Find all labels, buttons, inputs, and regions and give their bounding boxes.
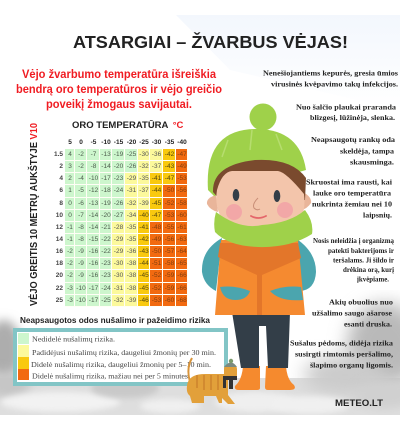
hair xyxy=(213,160,306,200)
wind chill table: -39 xyxy=(127,297,136,304)
boots xyxy=(235,366,295,390)
wind chill table: -68 xyxy=(177,297,187,304)
wind chill table: -24 xyxy=(114,187,123,194)
wind chill table: -1 xyxy=(67,236,73,243)
wind chill table: -66 xyxy=(177,272,187,279)
wind chill table: -16 xyxy=(89,248,98,255)
wind chill table: -58 xyxy=(177,200,187,207)
advice: feet: šlapimo organų ligomis. xyxy=(310,360,393,370)
wind chill table: -53 xyxy=(177,175,187,182)
wind chill table: -9 xyxy=(78,260,84,267)
legend text: Padidėjusi nušalimų rizika, daugeliui žmonių per 30 min. xyxy=(32,348,216,357)
wind chill table: -10 xyxy=(89,175,98,182)
wind chill table: -23 xyxy=(101,272,111,279)
wind chill table: -41 xyxy=(152,175,161,182)
left sleeve xyxy=(202,238,222,291)
advice: hands: skausminga. xyxy=(350,158,394,166)
legend panel xyxy=(15,330,226,384)
wind chill table: 10 xyxy=(56,212,63,219)
cat body xyxy=(187,374,235,404)
wind chill table: -49 xyxy=(177,163,187,170)
wind chill table: -10 xyxy=(101,139,111,146)
wind chill table: -2 xyxy=(67,272,73,279)
legend text: Didelė nušalimų rizika, daugeliui žmonių per 5–10 min. xyxy=(31,360,211,369)
wind chill table: -30 xyxy=(152,139,161,146)
wind chill table: -17 xyxy=(101,175,111,182)
wind chill table: -32 xyxy=(114,297,123,304)
advice: nose: įkvėpiame. xyxy=(357,276,389,284)
legend swatch: high risk xyxy=(18,357,29,369)
coat yoke and zip xyxy=(218,243,301,315)
wind chill table: -2 xyxy=(67,260,73,267)
advice: hair: blizgesį, lūžinėja, slenka. xyxy=(310,113,395,122)
advice: feet: susirgti rimtomis peršalimo, xyxy=(295,350,393,358)
advice: hair: Nuo šalčio plaukai praranda xyxy=(296,102,396,112)
wind chill table: -42 xyxy=(165,151,174,158)
wind chill table: -10 xyxy=(76,297,86,304)
wind chill table: -47 xyxy=(177,151,187,158)
wind chill table: -30 xyxy=(139,151,149,158)
wind chill table: -4 xyxy=(78,175,84,182)
legend text: Didelė nušalimų rizika, mažiau nei per 5 minutes. xyxy=(32,372,190,380)
cat head xyxy=(224,365,237,379)
advice: cheeks xyxy=(306,178,392,220)
advice: cheeks: laipsnių. xyxy=(363,210,392,220)
wind chill table: -14 xyxy=(89,212,98,219)
wind chill table: -51 xyxy=(152,260,161,267)
wind chill table: -38 xyxy=(127,260,136,267)
red intro text: poveikį žmogaus savijautai. xyxy=(46,97,192,111)
wind chill table: -56 xyxy=(165,236,174,243)
wind chill table: -60 xyxy=(177,212,187,219)
wind chill table: 20 xyxy=(56,272,63,279)
wind chill table: -52 xyxy=(152,272,161,279)
legend swatch: low risk xyxy=(18,333,29,344)
wind chill table: 2 xyxy=(68,175,72,182)
wind chill table: -26 xyxy=(127,163,136,170)
wind chill table: -40 xyxy=(177,139,187,146)
wind chill table: -31 xyxy=(127,187,136,194)
advice: hands: Neapsaugotų rankų oda xyxy=(311,135,395,144)
wind chill table: -8 xyxy=(78,236,84,243)
wind chill table: -44 xyxy=(139,260,149,267)
wind chill table: -44 xyxy=(152,187,161,194)
advice: cheeks: nukrinta žemiau nei 10 xyxy=(312,200,392,208)
wind chill table: 2 xyxy=(59,163,63,170)
wind chill table: -14 xyxy=(89,224,98,231)
wind chill table: -52 xyxy=(165,200,174,207)
advice: feet xyxy=(290,338,393,370)
wind chill table: -3 xyxy=(67,285,73,292)
title: ATSARGIAI – ŽVARBUS VĖJAS! xyxy=(73,31,348,52)
legend text xyxy=(31,334,216,380)
cat tail xyxy=(188,358,192,382)
wind chill table: -2 xyxy=(78,151,84,158)
wind chill table: -25 xyxy=(101,297,111,304)
advice: nose: patekti bakterijoms ir xyxy=(328,248,394,255)
wind chill table: -29 xyxy=(114,248,123,255)
background sky tint xyxy=(176,15,400,110)
wind chill table: -8 xyxy=(91,163,96,170)
wind chill table: -22 xyxy=(101,236,111,243)
wind chill table: -64 xyxy=(177,248,187,255)
wind chill table: -28 xyxy=(114,224,123,231)
advice: hats xyxy=(263,68,398,88)
wind chill table: -53 xyxy=(152,297,161,304)
wind chill table: -50 xyxy=(152,248,161,255)
wind chill table: 8 xyxy=(59,200,63,207)
red intro text xyxy=(16,67,222,111)
wind chill table: -63 xyxy=(177,236,187,243)
wind chill table: -40 xyxy=(139,212,149,219)
wind chill table: -57 xyxy=(165,248,174,255)
advice: eyes: užšalimo saugo ašarose xyxy=(312,308,393,318)
wind chill table: 1.5 xyxy=(54,151,63,158)
vertical axis label: wind speed: VĖJO GREITIS 10 METRŲ AUKŠTYJE V10 xyxy=(28,123,40,306)
wind chill table: -36 xyxy=(152,151,161,158)
hat ribs xyxy=(222,130,282,157)
pompom xyxy=(250,104,276,130)
wind chill table: -12 xyxy=(89,187,98,194)
wind chill table: -50 xyxy=(165,187,174,194)
red intro text: Vėjo žvarbumo temperatūra išreiškia xyxy=(22,67,216,81)
orange coat xyxy=(215,240,305,315)
wind chill table: -36 xyxy=(127,248,136,255)
wind chill table: -56 xyxy=(177,187,187,194)
cat stripes xyxy=(197,375,218,390)
wind chill table: -49 xyxy=(152,236,161,243)
right ear xyxy=(301,192,311,210)
wind chill table: -17 xyxy=(89,297,98,304)
wind chill table: -2 xyxy=(78,163,84,170)
advice: eyes: Akių obuolius nuo xyxy=(329,298,393,306)
wind chill table: 4 xyxy=(68,151,72,158)
wind chill table: -25 xyxy=(139,139,149,146)
wind chill table: -17 xyxy=(89,285,98,292)
wind chill table: -25 xyxy=(127,151,136,158)
wind chill table: -19 xyxy=(114,151,123,158)
wind chill table: -47 xyxy=(152,212,161,219)
illustration: child in winter clothes xyxy=(202,104,316,390)
wind chill table: -65 xyxy=(177,260,187,267)
wind chill table: -53 xyxy=(165,212,174,219)
wind chill table: 5 xyxy=(68,139,72,146)
wind chill table: -27 xyxy=(114,212,123,219)
wind chill table: -60 xyxy=(165,297,174,304)
wind chill table: -31 xyxy=(114,285,123,292)
cat scarf xyxy=(223,376,237,389)
wind chill table: -66 xyxy=(177,285,187,292)
scarf xyxy=(214,210,312,247)
wind chill table: 0 xyxy=(79,139,83,146)
wind chill table: -15 xyxy=(114,139,123,146)
wind chill table: -46 xyxy=(139,297,149,304)
right sleeve xyxy=(292,236,316,291)
wind chill table: 4 xyxy=(59,175,63,182)
wind chill table: -20 xyxy=(114,163,123,170)
wind chill table: 18 xyxy=(56,260,63,267)
wind chill table: 22 xyxy=(56,285,63,292)
wind chill table: -61 xyxy=(177,224,187,231)
wind chill table: -58 xyxy=(165,260,174,267)
advice: hats: virusinės kvėpavimo takų infekcijos. xyxy=(271,80,398,88)
wind chill table: -43 xyxy=(139,248,149,255)
left pocket xyxy=(220,286,250,300)
cheeks xyxy=(226,202,293,220)
wind chill table: -5 xyxy=(91,139,96,146)
wind chill table: -35 xyxy=(165,139,174,146)
advice: nose xyxy=(313,238,395,284)
wind chill table: -16 xyxy=(89,272,98,279)
wind chill table: -32 xyxy=(127,200,136,207)
wind chill table: 25 xyxy=(56,297,63,304)
wind chill table: -8 xyxy=(78,224,84,231)
wind chill table: 0 xyxy=(68,212,72,219)
wind chill table: 6 xyxy=(59,187,63,194)
nose xyxy=(254,198,260,210)
legend text: Nedidelė nušalimų rizika. xyxy=(32,334,115,344)
wind chill table: -20 xyxy=(127,139,136,146)
wind chill table: -21 xyxy=(101,224,111,231)
wind chill table: -29 xyxy=(114,236,123,243)
wind chill table: -5 xyxy=(78,187,84,194)
wind chill table: -43 xyxy=(165,163,174,170)
wind chill table: -18 xyxy=(101,187,111,194)
wind chill table: -59 xyxy=(165,285,174,292)
mouth xyxy=(251,216,266,218)
left ear xyxy=(207,195,218,212)
advice: cheeks: lauke oro temperatūra xyxy=(313,188,391,198)
hat xyxy=(208,129,306,196)
right pocket xyxy=(270,286,303,300)
wind chill table: -7 xyxy=(78,212,84,219)
right column advice text xyxy=(202,68,398,390)
wind chill table: -24 xyxy=(101,285,111,292)
trousers xyxy=(232,312,290,368)
wind chill table: -48 xyxy=(152,224,161,231)
eyes xyxy=(233,189,280,202)
wind chill table: -37 xyxy=(139,187,149,194)
wind chill table: -22 xyxy=(101,248,111,255)
wind chill table: -9 xyxy=(78,272,84,279)
wind chill table: 14 xyxy=(56,236,63,243)
wind chill table: -6 xyxy=(78,200,84,207)
wind chill table: -41 xyxy=(139,224,149,231)
legend heading: Neapsaugotos odos nušalimo ir pažeidimo rizika xyxy=(20,316,211,325)
wind chill table: 0 xyxy=(68,200,72,207)
wind chill table: -35 xyxy=(127,236,136,243)
advice: hair xyxy=(296,102,396,122)
wind chill table: -45 xyxy=(152,200,161,207)
wind chill table: -32 xyxy=(139,163,149,170)
advice: nose: Nosis neleidžia į organizmą xyxy=(313,238,395,245)
advice: eyes xyxy=(312,298,393,328)
wind chill table: -23 xyxy=(101,260,111,267)
wind chill table: -37 xyxy=(152,163,161,170)
advice: cheeks: Skruostai ima rausti, kai xyxy=(306,178,392,186)
wind chill table: -39 xyxy=(139,200,149,207)
cat hat xyxy=(224,362,237,367)
advice: hats: Nenešiojantiems kepurės, gresia ūmios xyxy=(263,68,398,78)
wind chill table: -38 xyxy=(127,285,136,292)
wind chill table: -35 xyxy=(127,224,136,231)
wind chill table: -34 xyxy=(127,212,136,219)
wind chill table: -45 xyxy=(139,272,149,279)
wind chill table: -20 xyxy=(101,212,111,219)
advice: hands: skeldėja, tampa xyxy=(340,146,394,156)
chart heading: air temperature: ORO TEMPERATŪRA °C xyxy=(72,120,184,131)
wind chill table: -47 xyxy=(165,175,174,182)
advice: nose: teršalams. Ji šildo ir xyxy=(333,258,394,264)
wind chill table: -10 xyxy=(76,285,86,292)
illustration: cat with hat and scarf xyxy=(187,358,237,404)
wind chill table: -14 xyxy=(101,163,111,170)
wind chill table: -29 xyxy=(127,175,136,182)
legend swatch: very high risk xyxy=(18,369,29,380)
wind chill table: 16 xyxy=(56,248,63,255)
background clouds xyxy=(0,303,400,415)
red intro text: bendrą oro temperatūros ir vėjo greičio xyxy=(16,82,222,96)
wind chill table: -52 xyxy=(152,285,161,292)
wind chill table: -3 xyxy=(67,297,73,304)
wind chill table: -16 xyxy=(89,260,98,267)
wind chill table: 12 xyxy=(56,224,63,231)
wind chill table: -30 xyxy=(114,260,123,267)
wind chill table: -30 xyxy=(114,272,123,279)
wind chill table: -9 xyxy=(78,248,84,255)
wind chill table: -19 xyxy=(101,200,111,207)
advice: nose: drėkina orą, kurį xyxy=(343,267,394,274)
wind chill table: -2 xyxy=(67,248,73,255)
wind chill table: 1 xyxy=(68,187,72,194)
advice: feet: Sušalus pėdoms, didėja rizika xyxy=(290,338,393,348)
wind chill table: -45 xyxy=(139,285,149,292)
face xyxy=(216,171,304,231)
source label: METEO.LT xyxy=(335,398,384,408)
wind chill table: -15 xyxy=(89,236,98,243)
advice: eyes: esanti druska. xyxy=(344,320,392,328)
wind chill table: 3 xyxy=(68,163,72,170)
wind chill table: -7 xyxy=(91,151,96,158)
wind chill table: -13 xyxy=(89,200,98,207)
advice: hands xyxy=(311,135,395,166)
wind chill table: -42 xyxy=(139,236,149,243)
wind chill table: -38 xyxy=(127,272,136,279)
wind chill table: -59 xyxy=(165,272,174,279)
legend swatch: increased risk xyxy=(18,345,29,357)
wind chill table xyxy=(54,139,188,307)
wind chill table: -23 xyxy=(114,175,123,182)
wind chill table: -1 xyxy=(67,224,73,231)
wind chill table: -55 xyxy=(165,224,174,231)
wind chill table: -35 xyxy=(139,175,149,182)
wind chill table: -13 xyxy=(101,151,111,158)
wind chill table: -26 xyxy=(114,200,123,207)
